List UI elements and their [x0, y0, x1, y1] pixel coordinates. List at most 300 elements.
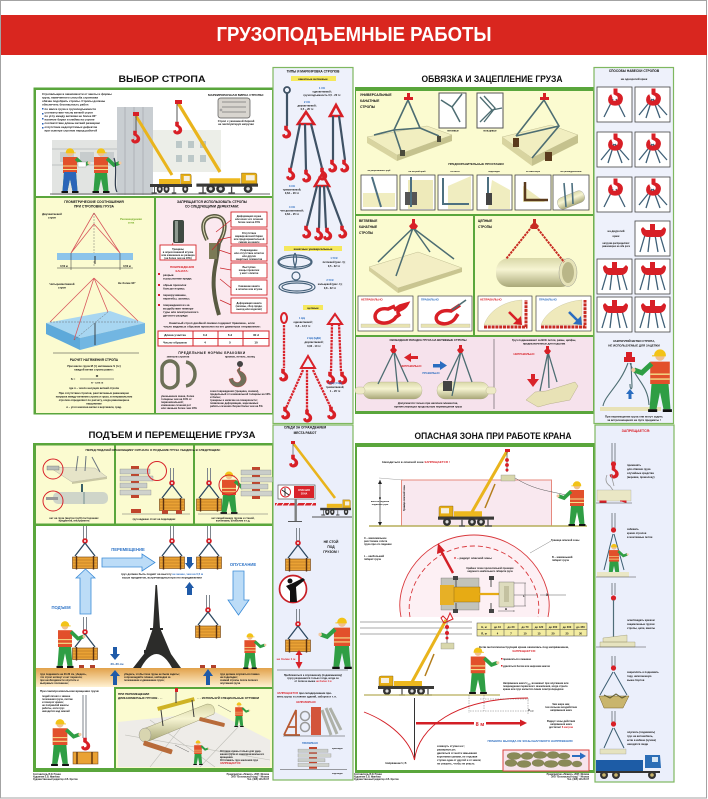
branch rope slings: ВЕТВЕВЫЕ: [359, 219, 377, 223]
panel: sling types and marking: 3 ЦЦ (4 ЦЦ): [328, 381, 342, 385]
sling: 3SK: [286, 112, 327, 182]
panel: prohibited sling defects: Повреждение: [241, 249, 258, 252]
crane touching power lines: [360, 613, 569, 695]
table: danger radius by height: до 10: [494, 625, 502, 629]
text block: sling selection rules: груза, намеченного способа строповки: [42, 96, 98, 100]
panel: watch the fencing: ПОД: [327, 545, 335, 549]
plan view of danger zone: B: [505, 607, 508, 611]
protective spacers: на острый край: [409, 170, 426, 173]
credits right: Художественный редактор А.В. Кротов: [354, 778, 399, 781]
panel: watch the fencing: ЗАПРЕЩАЕТСЯ при складировании при-: [277, 691, 332, 695]
panel: geometric relations: зона: [128, 220, 135, 224]
panel: prohibited sling defects: дугового разряда: [163, 314, 188, 318]
panel: prohibited sling defects: (заломы, сбор пряди,: [236, 305, 263, 308]
panel: prohibited sling defects: воздействия темпера-: [163, 306, 194, 310]
table: danger radius by height: [477, 623, 587, 636]
panel: prohibited sling defects: Деформация коуша: [237, 215, 262, 218]
arrow: lifting: [76, 569, 95, 614]
long load moving scene: . . . ИСПОЛЬЗУЙ СПЕЦИАЛЬНЫЕ ОТТЯЖКИ: [197, 696, 259, 700]
pre-lift checks: груз надежно стоит на подкладках: [133, 518, 176, 521]
crane touching power lines: Напряжение шага U: [503, 682, 527, 685]
step voltage chart: достигает 8 метров: [549, 726, 573, 729]
panel: sling types and marking: канатные универсальные: [294, 247, 333, 251]
text block: lifting notes: убедись, чтобы твои грузы не были задеты;: [124, 673, 180, 676]
step voltage chart: тем сильнее воздействие: [545, 706, 578, 709]
plan view of danger zone: Крайнее точка горизонтальной проекции: [467, 567, 514, 570]
table: danger radius by height: H, м: [481, 625, 487, 629]
panel: sling types and marking: 2 УСК: [326, 278, 334, 282]
lifting and moving diagram: [51, 526, 266, 685]
manual load orientation: не поправляй канаты: [42, 704, 69, 707]
text block: lifting notes: при необходимости опустите и: [40, 679, 79, 682]
sling: 2SK: [298, 100, 349, 172]
table: danger radius by height: 15: [538, 632, 541, 636]
panel: sling types and marking: кольцевой (рис. 1);: [318, 282, 342, 286]
text block: sling selection rules: при осмотре стропов перед работой: [44, 128, 97, 132]
plan view of danger zone: Граница опасной зоны: [551, 539, 579, 542]
credits right: Составитель В.И. Пушко: [354, 774, 383, 776]
table: broken wire norms: Длина участка: [164, 333, 186, 337]
text block: sling tension calculation: стропов определяют по расчету, когда равномерное: [59, 399, 130, 402]
item: hammering hook: [596, 513, 653, 577]
panel: prohibited actions: [595, 425, 674, 782]
plan view of danger zone: расстояние отлета: [364, 540, 388, 543]
step voltage chart: шаг: [530, 710, 534, 712]
crane touching power lines: шаг: [527, 684, 531, 686]
credits left: Предприятие «Плакат», 2007, Москва: [227, 774, 270, 776]
panel: watch the fencing: ГРУЗОМ !: [323, 550, 339, 554]
text block: sling tension calculation: При отсутствии стропов, рассчитанных равномерно: [59, 391, 130, 395]
free laying on branch slings: предназначенные для подъема: [523, 342, 566, 346]
credits left: Художник Е.В. Иванова: [33, 776, 60, 778]
table: danger radius by height: 25: [566, 632, 569, 636]
free laying on branch slings: [355, 338, 578, 409]
lifting and moving diagram: ОПУСКАНИЕ: [230, 562, 256, 567]
side view of crane: [369, 449, 587, 526]
long load moving scene: жания груза от самопроизвольного: [219, 753, 265, 756]
table: danger radius by height: 7: [510, 632, 512, 636]
universal slings: СТРОПЫ: [360, 105, 376, 109]
protective spacers: из листа: [450, 171, 460, 173]
plan view of danger zone: [364, 535, 579, 617]
credits right: ЗАО "Безопасный труд" - Москва: [551, 776, 590, 778]
table: broken wire norms: [158, 331, 269, 346]
sling: 1SK: одноветвевой;: [312, 90, 332, 94]
side view of crane: высота подъема: [371, 501, 390, 503]
protective spacers: подкладка: [488, 171, 501, 173]
rules for exiting the step voltage zone: короткими шагами, не отрывая: [437, 756, 478, 758]
item: prying hook: случайные средства: [627, 471, 654, 475]
panel: prohibited sling defects: Деформация каната: [237, 302, 262, 305]
crane with warning sign: ЗОНА: [301, 492, 308, 496]
panel: watch the fencing: мять грузы и стояние зданий, заборов и т. п.: [277, 694, 337, 698]
panel: geometric relations: Четырехветвевой: [50, 282, 75, 286]
panel: prohibited sling defects: Выступаю: [242, 266, 256, 269]
panel: prohibited sling defects: концы проволок: [239, 269, 260, 272]
panel: sling types and marking: 1 ЦЦ: [299, 316, 305, 320]
item: loading truck with people in cab: если в кабине (кузове): [627, 738, 656, 742]
branch rope slings: НЕПРАВИЛЬНО: [361, 298, 384, 302]
sling: 4SK: трехветвевой;: [283, 188, 301, 192]
panel: hanging methods: [594, 68, 674, 424]
item: freeing pinned slings: стропы, цепи, канаты: [627, 627, 656, 630]
plan view of danger zone: наружного наибольшего габарита груза: [467, 570, 513, 573]
text block: sling selection rules: по массе груза и грузоподъемности: [44, 107, 96, 111]
panel: prohibited sling defects: или износ его сечения: [235, 218, 263, 221]
panel: prohibited sling defects: уменьшение звена, более: [161, 394, 195, 398]
panel: prohibited sling defects: смазки на канате: [238, 241, 260, 244]
lifting and moving diagram: ПОДЪЕМ: [51, 605, 71, 610]
lifting and moving diagram: выше предметов, встречающихся при его передвижении: [122, 576, 202, 580]
panel: geometric relations: Не более 90°: [118, 281, 136, 285]
credits left: Тел. (495) 123-45-67: [247, 778, 270, 781]
lifting and moving diagram: 20–30 см: [110, 662, 124, 666]
table: danger radius by height: до 200: [549, 625, 558, 629]
table: broken wire norms: 30 d: [253, 333, 259, 337]
panel: prohibited sling defects: КАНАТА:: [176, 269, 188, 273]
panel: geometric relations: 0,50 м: [123, 264, 131, 268]
panel: geometric relations: ГЕОМЕТРИЧЕСКИЕ СООТНОШЕНИЯ: [64, 200, 124, 204]
panel: prohibited sling defects: в оплетке или втулке: [236, 288, 263, 291]
stack: right: ПРАВИЛЬНО: [302, 742, 318, 745]
heading: sling types: ТИПЫ И МАРКИРОВКА СТРОПОВ: [287, 70, 340, 74]
credits right: Предприятие «Плакат», 2007, Москва: [547, 774, 590, 776]
panel: prohibited sling defects: более чем на 15%: [238, 221, 261, 224]
panel: hanging methods: на однорогий крюк: [621, 77, 648, 81]
side view of crane: Граница опасной зоны: [403, 485, 406, 511]
stack: right: прокладки: [332, 748, 343, 750]
panel: sling types and marking: 0,5 - 32 тс: [328, 264, 341, 268]
free laying on branch slings: ПРАВИЛЬНО: [422, 371, 440, 375]
panel: sling types and marking: трехветвевой;: [326, 385, 344, 389]
panel: prohibited sling defects: [158, 200, 271, 410]
protective spacers: из швеллера: [526, 171, 541, 173]
table: broken wire norms: 3 d: [203, 333, 207, 337]
text block: lifting notes: положением и движением груза;: [124, 679, 165, 682]
heading: lifting: ПОДЪЕМ И ПЕРЕМЕЩЕНИЕ ГРУЗА: [88, 430, 256, 440]
item: freeing pinned slings: [596, 583, 656, 647]
manual load orientation: и поворот крюка;: [42, 701, 64, 704]
heading: choosing a sling: ВЫБОР СТРОПА: [118, 74, 206, 84]
panel: prohibited sling defects: зона повреждения (трещина, снимок),: [210, 389, 259, 393]
panel: sling types and marking: 0,63 - 10 тс: [307, 344, 321, 348]
panel: prohibited sling defects: (на более чем на 10%): [164, 257, 192, 260]
sling: 2SK: двухветвевой;: [298, 104, 317, 108]
crane with warning sign: ОПАСНАЯ: [298, 489, 310, 492]
plan view of danger zone: B – наименьший: [552, 556, 573, 559]
panel: danger zone: [354, 431, 595, 781]
rules for exiting the step voltage zone: развернуться;: [437, 748, 456, 752]
table: danger radius by height: R, м: [481, 632, 487, 636]
chain slings: ЦЕПНЫЕ: [478, 219, 492, 223]
panel: sling types and marking: 0,8 - 32 тс: [324, 286, 337, 290]
panel: prohibited sling defects: трещины и наличие на поверхности;: [210, 399, 258, 402]
step voltage chart: Радиус зоны действия: [547, 720, 576, 723]
panel: prohibited sling defects: или звеньев более чем 10%: [161, 406, 198, 410]
panel: watch the fencing: от пола не выше не более 1 м: [294, 680, 332, 683]
panel: prohibited sling defects: Канатный строп двойной свивки содержит бракован., если: [169, 321, 255, 325]
side view of crane: Н: [379, 496, 381, 500]
step voltage chart: U: [528, 708, 530, 712]
manual load orientation: положения груза, снятие: [42, 698, 73, 701]
panel: sling types and marking: цепные: [307, 306, 319, 310]
free laying on branch slings: СВОБОДНАЯ УКЛАДКА ГРУЗА НА ВЕТВЕВЫЕ СТРОПЫ: [390, 338, 467, 342]
panel: prohibited sling defects: разрыв: [163, 273, 174, 277]
panel: prohibited sling defects: работы сечения сборки более чем на 5%: [210, 404, 263, 408]
heading: hanging methods: СПОСОБЫ НАВЕСКИ СТРОПОВ: [609, 69, 660, 73]
panel: sling types and marking: двухветвевой;: [305, 340, 324, 344]
panel: hanging methods: крюк: [613, 234, 620, 238]
tag: sling marking: не эксплуатируя нагрузки: [218, 122, 254, 126]
plan view of danger zone: R – радиус опасной зоны: [454, 556, 492, 560]
universal loop slings: [278, 253, 315, 293]
heading: danger zone: ОПАСНАЯ ЗОНА ПРИ РАБОТЕ КРАНА: [414, 431, 572, 441]
panel: prohibited sling defects: Снижение каната: [238, 285, 260, 288]
icons: sling connection types: кольцевые: [483, 130, 497, 132]
panel: hanging methods: равномерно на оба рога: [602, 245, 631, 248]
text block: lifting notes: на подкладки;: [220, 676, 238, 679]
stack: right: [280, 742, 347, 775]
item: prying hook: [596, 443, 655, 503]
panel: prohibited sling defects: или отсутствие оплеток: [234, 252, 265, 255]
table: danger radius by height: до 300: [563, 625, 572, 629]
pre-lift checks: ПЕРЕД ПОДАЧЕЙ КРАНОВЩИКУ СИГНАЛА О ПОДЪЕМЕ ГРУЗА УБЕДИСЬ В СЛЕДУЮЩЕМ:: [86, 448, 220, 452]
panel: prohibited sling defects: перекручивание,: [163, 293, 187, 297]
text: do not stand under load: НЕ СТОЙ: [324, 540, 339, 544]
table: danger radius by height: до 450: [576, 625, 585, 629]
text block: sling selection rules: наличие бирки и клейма на стропе: [44, 118, 95, 122]
lifting and moving diagram: ПЕРЕМЕЩЕНИЕ: [111, 547, 145, 552]
credits left: Художественный редактор А.В. Кротов: [33, 778, 78, 781]
text block: lifting notes: груз поднимите на 20-30 см, убедись,: [40, 673, 87, 676]
panel: sling types and marking: 2 ЦЦ (ЦДВ): [307, 336, 321, 340]
text block: lifting notes: груз должен опускаться плавно: [220, 673, 260, 676]
chain slings: [284, 324, 341, 412]
pre-lift checks: нет людей между грузом и стеной,: [212, 517, 255, 520]
item: freeing pinned slings: освобождать крюком: [627, 618, 655, 622]
text block: sling selection rules: обязан подобрать стропы. Стропы должны: [42, 99, 106, 103]
panel: prohibited sling defects: первоначальной;: [161, 400, 184, 404]
item: lifting overfilled container: выше бортов: [627, 678, 645, 682]
item: hammering hook: в монтажные петли: [627, 536, 653, 539]
step voltage chart: [364, 695, 578, 765]
long load moving scene: ДЛИННОМЕРНЫХ ГРУЗОВ . . .: [118, 696, 163, 700]
icon: prohibition: [280, 576, 306, 602]
text block: sling tension calculation: нагружение: [86, 402, 102, 406]
crane touching power lines: повреждении первичного заземления, когда стрела: [503, 685, 568, 688]
sling: 1SK: грузоподъемность 0,5 - 20 тс: [303, 93, 341, 97]
table: broken wire norms: 6 d: [228, 333, 232, 337]
plan view of danger zone: X – максимальное: [364, 537, 387, 540]
panel: prohibited sling defects: выход или изделия): [236, 308, 262, 311]
item: prying hook: (веревки, проволоку): [627, 475, 655, 479]
title banner: ГРУЗОПОДЪЕМНЫЕ РАБОТЫ: [216, 24, 492, 46]
panel: prohibited sling defects: маркировочной бирки: [235, 235, 263, 238]
crane with warning sign: [275, 441, 352, 522]
plan view of danger zone: L: [523, 594, 525, 598]
arrow: moving: [102, 554, 155, 571]
text block: sling selection rules: по углу между ветвями не более 90°: [44, 114, 97, 118]
table: danger radius by height: 20: [552, 632, 555, 636]
pre-lift checks: нет на грузе (внутри труб) посторонних: [49, 517, 99, 520]
panel: prohibited sling defects: у мест оплетки: [240, 272, 259, 275]
tag: sling marking: Строп с указанной биркой: [218, 119, 255, 123]
panel: geometric relations: Рекомендуемая: [120, 217, 142, 221]
manual load orientation: [40, 689, 99, 766]
chain slings: НЕПРАВИЛЬНО: [480, 298, 503, 302]
plan view of danger zone: L – наибольший: [364, 555, 384, 558]
panel: prohibited sling defects: Трещины: [172, 248, 184, 251]
long load moving scene: Оттяжки нужны только для удер-: [220, 750, 262, 753]
text block: sling tension calculation: S =: [71, 377, 76, 381]
item: loading truck with people in cab: [596, 711, 661, 779]
table: broken wire norms: Число обрывов: [163, 340, 187, 344]
panel: prohibited sling defects: и более;: [210, 395, 221, 399]
long load moving scene: ПРИ ПЕРЕМЕЩЕНИИ: [118, 692, 149, 696]
panel: prohibited sling defects: число видимых обрывов проволок на его диаметрах отправление:: [163, 324, 261, 328]
table: broken wire norms: 4: [204, 340, 206, 344]
long load moving scene: ЗАПРЕЩАЕТСЯ: [220, 761, 240, 765]
panel: prohibited sling defects: обрыв проволок: [163, 283, 187, 287]
table: danger radius by height: до 120: [535, 625, 544, 629]
sling: 4SK: четырехветвевой;: [280, 208, 304, 212]
panel: prohibited sling defects: туры или электрического: [163, 310, 199, 314]
step voltage chart: напряжения шага: [550, 723, 572, 726]
panel: choosing a sling: [34, 74, 272, 414]
panel: prohibited sling defects: ПОВРЕЖДЕНИЯ: [170, 265, 194, 269]
free laying on branch slings: препятствующих продольным перемещения груза: [394, 406, 462, 408]
plan view of danger zone: груза при его падении: [364, 543, 392, 546]
worker fastening unused sling branches: НЕ ИСПОЛЬЗУЕМЫЕ ДЛЯ ЗАЦЕПКИ: [608, 344, 660, 348]
table: broken wire norms: 10: [254, 340, 258, 344]
credits right: Тел. (495) 123-45-67: [567, 778, 590, 781]
panel: geometric relations: строп: [58, 286, 66, 290]
panel: geometric relations: строп: [48, 216, 56, 220]
universal slings: УНИВЕРСАЛЬНЫЕ: [360, 93, 392, 97]
free laying on branch slings: Допускается только при наличии элементов,: [398, 401, 458, 405]
text block: sling selection rules: Стропальщик в зависимости от массы и формы: [42, 92, 112, 96]
panel: watch the fencing: МЕСТА РАБОТ: [294, 431, 316, 435]
credits left: Составитель В.И. Пушко: [33, 774, 62, 776]
rules for exiting the step voltage zone: сомкнуть ступни ног;: [437, 745, 465, 748]
text block: sling tension calculation: n · cos α: [91, 380, 103, 384]
plan view of danger zone: габарит груза: [552, 559, 569, 562]
free laying on branch slings: Груз подвешивают за ВСЕ петли, рамы, цапфы,: [512, 338, 576, 342]
table: danger radius by height: 4: [497, 632, 499, 636]
text block: sling selection rules: отсутствие недопустимых дефектов: [44, 125, 97, 129]
text block: lifting notes: опускания груза: [220, 682, 241, 685]
sling: 1SK: 1 СК: [319, 86, 325, 90]
text block: sling tension calculation: каждой ветви стропа равно:: [74, 368, 114, 372]
stack: wrong: [283, 701, 345, 736]
free laying on branch slings: НЕПРАВИЛЬНО: [514, 352, 534, 356]
panel: prohibited sling defects: или предохранительной: [234, 238, 265, 241]
icons: sling connection types: [439, 93, 503, 132]
heading: fencing: СЛЕДИ ЗА ОГРАЖДЕНИЕМ: [284, 426, 326, 430]
scene: cranes at a construction site: [50, 100, 270, 195]
panel: watch the fencing: Приближаться к опускаемому (поднимаемому): [284, 674, 342, 677]
rules for exiting the step voltage zone: не спешить, чтобы не упасть: [437, 762, 475, 766]
rules for exiting the step voltage zone: ступни одна от другой и от земли;: [437, 758, 481, 762]
credits left: [33, 774, 270, 781]
worker fastening unused sling branches: При перемещении груза они могут задеть: [605, 414, 663, 418]
credits right: [354, 774, 590, 781]
manual load orientation: подай сигнал о замене: [42, 695, 71, 698]
step voltage chart: Чем шире шаг,: [552, 703, 570, 706]
panel: watch the fencing: грузу разрешается только тогда, когда он: [287, 677, 339, 680]
panel: prohibited sling defects: или других: [242, 255, 257, 258]
plan view of danger zone: X: [546, 593, 549, 597]
long load moving scene: Оттягивать груз наклоняя груз: [220, 759, 259, 762]
side view of crane: подвески груза: [372, 504, 389, 506]
rules for exiting the step voltage zone: ПРАВИЛА ВЫХОДА ИЗ ЗОНЫ ШАГОВОГО НАПРЯЖЕНИЯ: [487, 739, 573, 743]
text block: lifting notes: снимай стропы после полного: [220, 679, 259, 682]
text block: sling selection rules: обеспечить безопасность работ:: [42, 102, 89, 106]
panel: prohibited sling defects: изменение сечения рот: [161, 404, 192, 407]
long load moving scene: вращения.: [220, 756, 233, 759]
item: loading truck with people in cab: находятся люди: [627, 743, 648, 746]
pre-lift checks: колоннами, штабелем и т.д.: [216, 520, 250, 522]
panel: prohibited sling defects: звеньев стропов: [167, 356, 190, 358]
text block: sling selection rules: соответствие длины ветвей размерам: [44, 121, 100, 125]
table: broken wire norms: 5: [229, 340, 231, 344]
branch rope slings: КАНАТНЫЕ: [359, 225, 377, 229]
text block: lifting notes: что строп натянут и нет перекоса;: [40, 676, 83, 679]
panel: sling types and marking: 1 УСК: [330, 256, 338, 260]
crane touching power lines: Если металлоконструкция крана оказалась под напряжением,: [479, 645, 569, 649]
branch rope slings: ПРАВИЛЬНО: [421, 298, 440, 302]
text block: sling tension calculation: М: [96, 374, 99, 378]
lifting and moving diagram: груз должен быть поднят на высоту не менее, чем на 0,5 м: [121, 572, 203, 576]
crane touching power lines: крана или груз касается линии электропередачи: [503, 688, 564, 691]
panel: prohibited sling defects: и расслоение пряди;: [163, 276, 192, 280]
panel: prohibited sling defects: появление деформации, нарезаемых: [210, 401, 259, 405]
panel: hanging methods: на двурогий: [608, 229, 625, 233]
chain slings: СТРОПЫ: [478, 225, 492, 229]
tag: sling marking: [208, 93, 264, 126]
item: freeing pinned slings: защемленные грузом: [627, 623, 655, 626]
protective spacers: на цилиндрические: [560, 171, 582, 173]
item: loading truck with people in cab: груз на автомобиль,: [627, 734, 653, 738]
worker fastening unused sling branches: ЗАКРЕПЛЯЙ ВЕТВИ СТРОПА,: [613, 339, 655, 343]
item: lifting overfilled container: [599, 656, 659, 708]
panel: sling types and marking: 0,8 – 12,5 тс: [296, 324, 311, 328]
text block: sling tension calculation: [56, 358, 132, 409]
plan view of danger zone: габарит груза: [364, 558, 381, 561]
text block: sling selection rules: соответствие числу ветвей строп: [44, 110, 93, 114]
protective spacers: [361, 162, 589, 211]
heading: slinging: ОБВЯЗКА И ЗАЦЕПЛЕНИЕ ГРУЗА: [422, 74, 563, 84]
icons: sling connection types: петлевые: [447, 130, 459, 132]
panel: prohibited sling defects: или изменение ее размера: [161, 254, 195, 257]
panel: geometric relations: 0,50 м: [60, 264, 68, 268]
crane touching power lines: возникает при опускании или: [531, 682, 569, 685]
side view of crane: Находиться в опасной зоне ЗАПРЕЩАЕТСЯ !: [382, 460, 450, 464]
panel: hanging methods: нагрузка распределяют: [602, 243, 630, 245]
protective spacers: ПРЕДОХРАНИТЕЛЬНЫЕ ПРОСТАВКИ: [448, 162, 504, 166]
long load moving scene: [118, 688, 270, 767]
rules for exiting the step voltage zone: [437, 739, 589, 771]
sling: 2SK: 2 СК: [304, 100, 310, 104]
pre-lift checks: [43, 448, 274, 522]
panel: sling types and marking: канатные ветвевые: [298, 77, 328, 81]
chain slings: [478, 219, 591, 331]
item: loading truck with people in cab: опускать (поднимать): [627, 730, 655, 734]
text block: lifting notes: выправьте положение;: [40, 682, 69, 685]
arrow: lowering: [228, 571, 249, 615]
item: hammering hook: забивать: [627, 527, 639, 531]
panel: prohibited sling defects: толщины чем на 10% от: [161, 397, 192, 401]
